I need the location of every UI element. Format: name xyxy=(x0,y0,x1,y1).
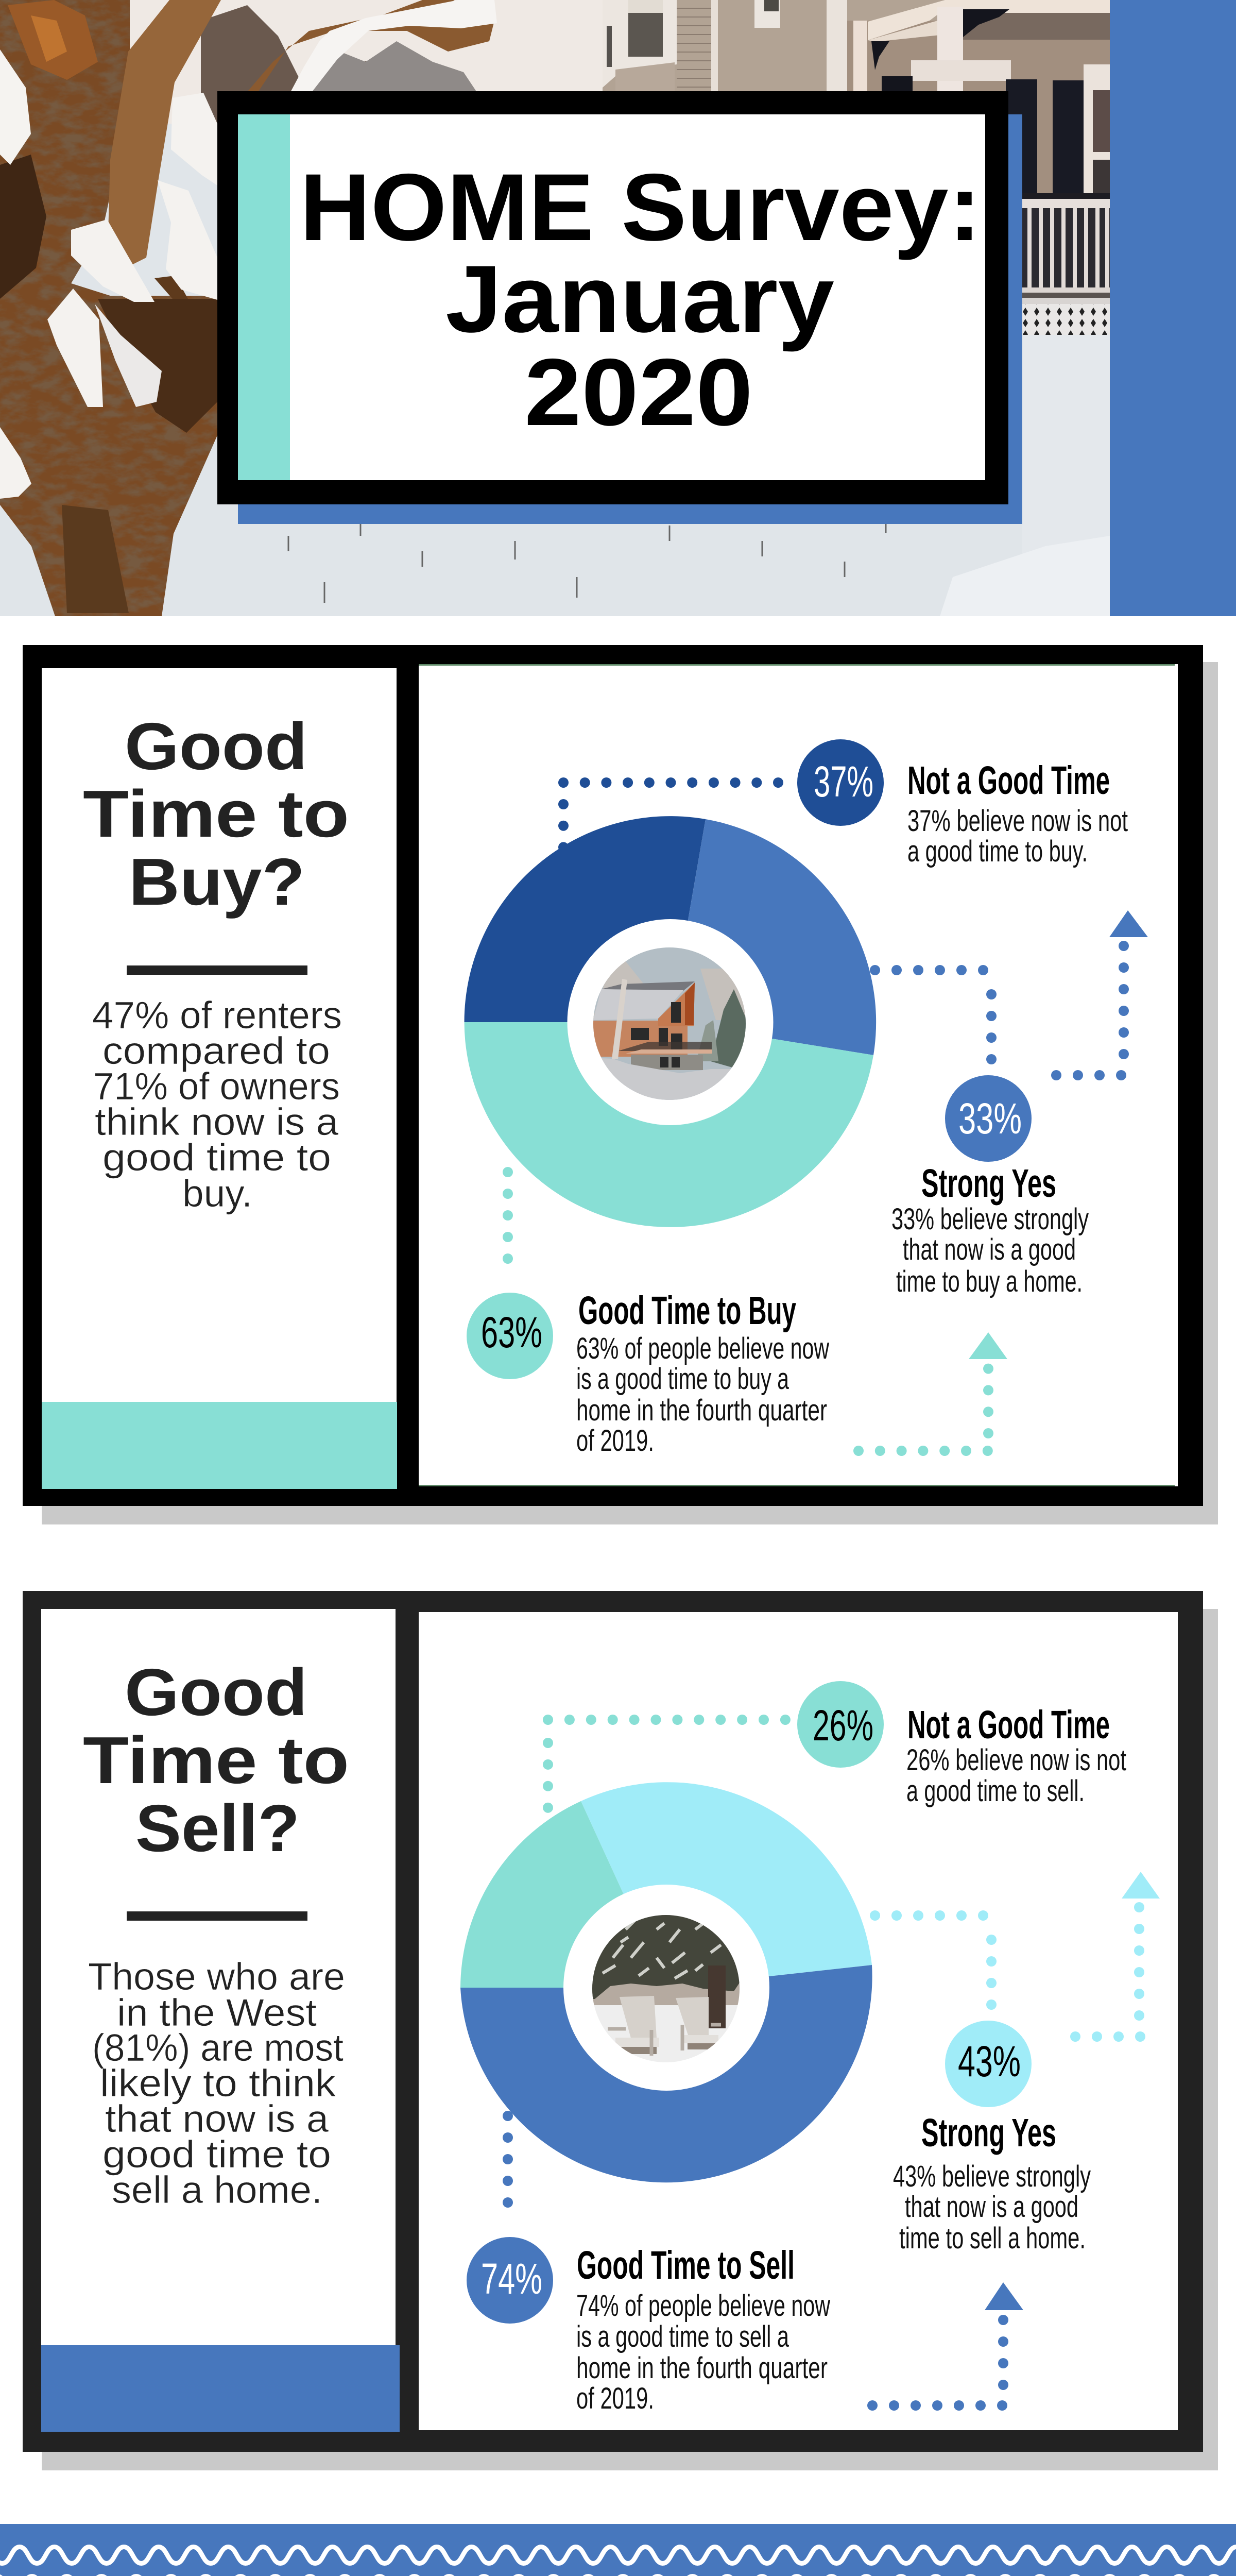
heading: Good xyxy=(125,709,307,784)
connector: strong yes dots xyxy=(875,1906,1141,2037)
sidebar text: in the West xyxy=(117,1991,317,2034)
hero header xyxy=(0,0,1236,616)
stat: not a good time: 37% xyxy=(814,757,873,806)
arrow: teal up with dots xyxy=(859,1332,1007,1451)
stat: strong yes: 33% believe strongly xyxy=(891,1202,1089,1236)
stat: strong yes: Strong Yes xyxy=(921,2111,1056,2155)
connector: good time dots xyxy=(503,1172,513,1260)
tree trunk with snow xyxy=(0,0,217,616)
heading xyxy=(83,1655,349,1866)
photo: snowy chairs xyxy=(590,1911,744,2066)
stat: not a good time xyxy=(797,1681,1126,1808)
heading: Time to xyxy=(83,1723,349,1798)
donut chart: buy xyxy=(465,816,876,1227)
title card: 2020 xyxy=(524,340,753,446)
heading: Good xyxy=(125,1655,307,1730)
sidebar text: Those who are xyxy=(88,1955,345,1998)
photo: snowy cabin xyxy=(592,947,747,1105)
stat: not a good time xyxy=(797,739,1128,868)
stat: strong yes xyxy=(891,1075,1089,1298)
title card xyxy=(217,91,1022,524)
connector: not a good time dots xyxy=(548,1720,787,1809)
heading xyxy=(83,709,349,919)
stat: strong yes: time to buy a home. xyxy=(896,1265,1083,1298)
sidebar: sell summary xyxy=(41,1609,400,2432)
connector: good time dots xyxy=(503,2116,513,2204)
heading: Sell? xyxy=(135,1791,300,1866)
right blue band xyxy=(1110,0,1236,616)
panel: good time to sell xyxy=(23,1591,1218,2470)
title text: HOME Survey: xyxy=(300,155,981,261)
stat: not a good time: 37% believe now is not xyxy=(907,804,1128,838)
sidebar text: likely to think xyxy=(100,2062,336,2105)
house siding xyxy=(603,0,945,91)
porch xyxy=(847,21,1110,206)
sidebar text: 71% of owners xyxy=(93,1065,340,1108)
stat: good time to sell: of 2019. xyxy=(576,2382,654,2415)
stat: strong yes: that now is a good xyxy=(905,2190,1078,2224)
stat: strong yes: 43% believe strongly xyxy=(893,2160,1091,2193)
stat: good time to buy: Good Time to Buy xyxy=(578,1289,796,1333)
sidebar text xyxy=(92,994,342,1215)
stat: not a good time: a good time to sell. xyxy=(906,1774,1085,1808)
sidebar text: good time to xyxy=(102,1136,331,1179)
sidebar text: that now is a xyxy=(105,2097,329,2140)
sidebar text: (81%) are most xyxy=(92,2026,344,2069)
divider: wave band xyxy=(0,2524,1236,2576)
stat: strong yes: 43% xyxy=(958,2037,1021,2086)
sidebar text: buy. xyxy=(182,1172,252,1215)
sidebar text: compared to xyxy=(102,1029,330,1072)
sidebar text: 47% of renters xyxy=(92,994,342,1037)
stat: strong yes: Strong Yes xyxy=(921,1161,1056,1206)
panel: good time to buy xyxy=(23,645,1218,1524)
stat: good time to buy xyxy=(467,1289,830,1458)
stat: good time to buy: home in the fourth quarter xyxy=(576,1394,827,1427)
sidebar: buy summary xyxy=(42,668,397,1489)
stat: good time to sell xyxy=(467,2237,831,2415)
sidebar text xyxy=(88,1955,345,2211)
stat: good time to buy: is a good time to buy a xyxy=(576,1362,789,1396)
arrow: blue up xyxy=(1109,910,1148,937)
stat: good time to buy: 63% of people believe now xyxy=(576,1332,830,1365)
stat: not a good time: Not a Good Time xyxy=(907,758,1110,803)
connector: not a good time dots xyxy=(563,783,779,849)
stat: not a good time: 26% xyxy=(813,1701,873,1750)
stat: good time to sell: home in the fourth quarter xyxy=(576,2351,828,2385)
donut chart: sell xyxy=(460,1782,872,2182)
stat: good time to sell: 74% xyxy=(481,2255,542,2303)
arrow: blue up with dots xyxy=(872,2282,1023,2405)
heading: Buy? xyxy=(129,845,305,919)
sidebar text: good time to xyxy=(102,2133,331,2176)
stat: good time to sell: is a good time to sell a xyxy=(576,2320,789,2353)
stat: good time to buy: 63% xyxy=(481,1308,542,1357)
stat: strong yes: 33% xyxy=(958,1094,1022,1143)
stat: good time to buy: of 2019. xyxy=(576,1424,654,1458)
connector: strong yes dots xyxy=(875,945,1124,1075)
stat: not a good time: Not a Good Time xyxy=(907,1703,1110,1747)
arrow: cyan up xyxy=(1122,1872,1160,1899)
hero photo: snowy house and tree xyxy=(0,0,1110,616)
title card: January xyxy=(445,246,834,352)
stat: not a good time: a good time to buy. xyxy=(907,835,1088,868)
stat: not a good time: 26% believe now is not xyxy=(906,1743,1126,1777)
sidebar text: sell a home. xyxy=(112,2168,322,2211)
stat: strong yes: time to sell a home. xyxy=(899,2222,1086,2255)
sidebar text: think now is a xyxy=(95,1100,339,1143)
stat: good time to sell: 74% of people believe now xyxy=(576,2289,831,2323)
stat: good time to sell: Good Time to Sell xyxy=(577,2243,795,2287)
heading: Time to xyxy=(83,777,349,851)
stat: strong yes xyxy=(893,2021,1091,2255)
stat: strong yes: that now is a good xyxy=(903,1233,1076,1266)
